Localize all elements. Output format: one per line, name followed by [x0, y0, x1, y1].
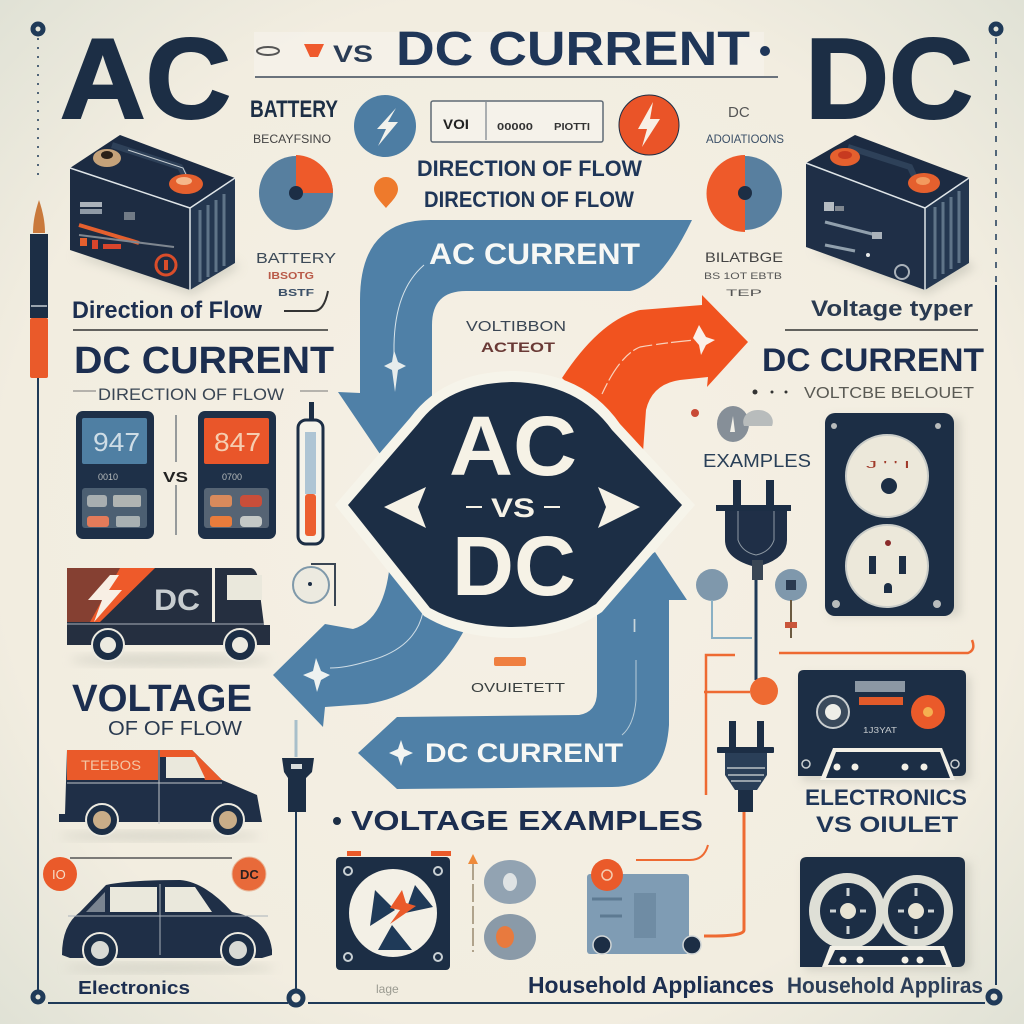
device: tape reels — [800, 857, 970, 970]
label: voltage detect center: VOLTIBBON — [466, 318, 566, 335]
arrow: AC current blue: AC CURRENT — [429, 238, 640, 271]
label: DC advantages — [706, 104, 784, 146]
central badge AC vs DC: DC — [452, 519, 576, 613]
wall outlet panel — [825, 413, 960, 616]
meter orange — [198, 411, 276, 539]
text: household appliances: Household Appliances — [528, 972, 774, 998]
orange wires — [704, 640, 973, 795]
arrow: AC current blue — [338, 220, 692, 457]
meter blue — [76, 411, 154, 539]
label: relatage right — [704, 249, 783, 298]
title: AC: AC — [60, 16, 231, 143]
table: voltage: VOI — [443, 116, 469, 132]
label: voltage detect center — [466, 318, 566, 355]
label: voltage detect center: ACTEOT — [481, 339, 556, 355]
node: orange dot — [750, 677, 778, 705]
arrow: lower right blue with DC current — [358, 552, 687, 789]
gray knobs — [468, 854, 536, 960]
caption: image: lage — [376, 982, 399, 996]
central badge AC vs DC — [335, 371, 695, 638]
small dial — [293, 564, 335, 606]
table: voltage: 00000 — [497, 122, 534, 133]
label: relatage right: BS 1OT EBTB — [704, 271, 782, 281]
central badge AC vs DC: VS — [491, 493, 535, 523]
battery right — [806, 135, 975, 294]
label: battery lower left: IBSOTG — [268, 271, 314, 282]
text: electronics: Electronics — [78, 978, 190, 998]
heading: DC current right — [752, 330, 984, 402]
small icons near examples — [691, 406, 773, 442]
label: battery: BATTERY — [250, 96, 338, 123]
device: radio panel: 1J3YAT — [863, 726, 897, 735]
battery left — [70, 135, 240, 295]
label: outlet center: OVUIETETT — [471, 680, 565, 695]
label: vs: VS — [163, 469, 188, 486]
orange badges: DC — [240, 867, 259, 882]
headings: direction of flow — [417, 156, 642, 212]
van orange: TEEBOS — [81, 757, 141, 773]
title: DC: DC — [805, 16, 973, 143]
thermometer probe — [298, 402, 323, 544]
label: outlet center — [471, 657, 565, 695]
headings: direction of flow: DIRECTION OF FLOW — [417, 156, 642, 181]
label: relatage right: BILATBGE — [705, 249, 783, 265]
label: battery lower left: BATTERY — [256, 250, 336, 267]
connector plug center-left — [282, 720, 314, 812]
label: electronics vs outlet: ELECTRONICS — [805, 785, 967, 810]
label: DC advantages: ADOIATIOONS — [706, 132, 784, 146]
lower plug — [717, 721, 774, 812]
heading: voltage of flow: VOLTAGE — [72, 678, 252, 720]
table: voltage: PIOTTI — [554, 122, 590, 133]
arrow: orange — [562, 295, 748, 452]
heading: DC current left: DC CURRENT — [74, 340, 334, 382]
heading: voltage of flow: OF OF FLOW — [108, 718, 242, 740]
label: electronics vs outlet: VS OIULET — [816, 812, 959, 837]
label: vs — [163, 415, 188, 535]
central badge AC vs DC: AC — [449, 399, 577, 493]
text: household appliances: Household Appliras — [787, 973, 983, 998]
icon: map pin — [374, 177, 398, 208]
meter blue: 0010 — [98, 472, 118, 482]
heading: VS DC current: VS — [333, 41, 373, 68]
arrow: lower right blue with DC current: I — [632, 616, 637, 636]
heading: voltage of flow — [72, 678, 252, 740]
device: radio panel — [798, 670, 970, 781]
orange badges: IO — [52, 867, 66, 882]
wall outlet panel: J ' ' I — [866, 460, 910, 471]
label: battery lower left — [256, 250, 336, 311]
text: voltage type: Voltage typer — [811, 296, 973, 321]
heading: VS DC current: DC CURRENT — [396, 23, 750, 76]
label: relatage right: TEP — [726, 288, 762, 298]
heading: DC current left: DIRECTION OF FLOW — [98, 385, 284, 404]
pie chart right — [706, 155, 782, 232]
heading: DC current right: VOLTCBE BELOUET — [804, 385, 974, 402]
label: garbled small text: BECAYFSINO — [253, 132, 331, 146]
meter orange: 0700 — [222, 472, 242, 482]
truck: DC van — [67, 568, 270, 666]
label: electronics vs outlet — [805, 785, 967, 837]
heading: DC current right: DC CURRENT — [762, 342, 984, 378]
blue appliance — [587, 859, 701, 954]
label: DC advantages: DC — [728, 104, 750, 121]
upper plug — [716, 480, 791, 680]
icon: blue bolt circle — [354, 95, 416, 157]
car — [62, 880, 275, 973]
meter orange: 847 — [214, 427, 261, 457]
arrow: lower left blue — [273, 562, 466, 727]
heading: DC current left — [73, 330, 334, 404]
headings: direction of flow: DIRECTION OF FLOW — [424, 187, 634, 212]
van orange — [59, 750, 262, 841]
orange badges — [43, 857, 266, 891]
heading: voltage examples: VOLTAGE EXAMPLES — [351, 805, 703, 836]
truck: DC van: DC — [154, 584, 200, 617]
icon: orange bolt circle — [619, 95, 679, 155]
label: battery lower left: BSTF — [278, 288, 314, 299]
orange cable — [636, 812, 744, 936]
arrow: lower right blue with DC current: DC CURRENT — [425, 738, 624, 768]
label: examples: EXAMPLES — [703, 451, 811, 471]
text: direction of flow: Direction of Flow — [72, 297, 262, 324]
meter blue: 947 — [93, 427, 140, 457]
text: household appliances — [528, 972, 983, 998]
fan panel — [336, 851, 451, 970]
side pins — [696, 569, 807, 638]
pie chart left — [259, 155, 333, 230]
heading: VS DC current — [254, 23, 778, 77]
table: voltage — [431, 101, 603, 142]
pen probe left — [30, 200, 48, 378]
